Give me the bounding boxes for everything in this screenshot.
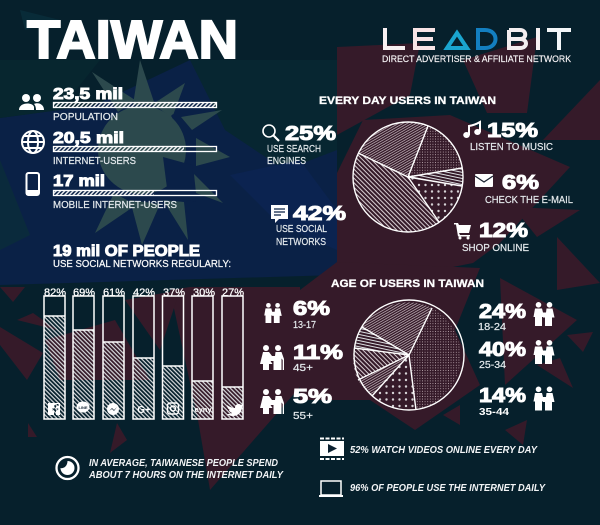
icon: music note [463,122,481,138]
stat: mobile users: 17 mil [53,173,105,190]
icon: twitter [227,404,243,416]
age stat: 25-34 [479,339,554,371]
icon: middle aged [534,386,554,410]
age stat: 13-17 [264,298,330,331]
age stat: 45+ [260,342,343,374]
icon: globe [22,131,44,153]
icon: video [320,438,344,459]
logo: Leadbit: DIRECT ADVERTISER & AFFILIATE NETWORK [382,54,572,65]
stat: shopping: 12% [479,220,528,242]
stat: population: 23,5 mil [53,86,123,103]
bar chart: social networks: 37% [163,287,185,299]
bar chart: social networks: 82% [44,287,66,299]
heading: every day users: EVERY DAY USERS IN TAIWAN [319,95,496,107]
icon: magnifier [263,125,279,141]
bar chart: social networks: 61% [103,287,125,299]
icon: line: LINE [78,405,88,410]
stat: search engines: USE SEARCH [267,143,321,155]
stat: internet users: INTERNET-USERS [53,155,136,167]
stat: e-mail [475,172,573,206]
icon: facebook [48,403,60,415]
icon: instagram [168,403,178,414]
age stat: 45+: 11% [293,342,343,364]
callout: daily hours [56,457,284,481]
age stat: 55+ [260,386,332,422]
logo: Leadbit [382,28,572,65]
icon: laptop [319,481,343,497]
stat: music [463,120,553,153]
icon: line [76,402,90,412]
stat: shopping: SHOP ONLINE [462,242,529,254]
icon: chat bubble [271,205,288,223]
stat: search engines [263,123,336,167]
bar chart: social networks: 30% [193,287,215,299]
age stat: 35-44 [479,385,554,418]
stat: internet users [22,130,216,167]
callout: watch videos [320,438,538,459]
icon: elderly [260,389,284,414]
icon: clock [56,457,78,479]
bar chart: social networks: 69% [73,287,95,299]
stat: mobile users: MOBILE INTERNET-USERS [53,199,177,211]
age stat: 25-34: 40% [479,339,526,361]
stat: social networks: NETWORKS [276,236,326,248]
callout: daily hours: ABOUT 7 HOURS ON THE INTERNET DAILY [88,470,284,481]
stat: mobile users [26,173,216,211]
age stat: 25-34: 25-34 [479,359,506,371]
icon: seniors [260,345,284,370]
heading: social networks [53,243,231,270]
heading: social networks: 19 mil OF PEOPLE [53,243,200,260]
heading: age of users: AGE OF USERS IN TAIWAN [331,278,484,290]
stat: music: LISTEN TO MUSIC [470,141,553,153]
pie chart: age of users [353,300,464,410]
icon: adults [534,340,554,364]
stat: music: 15% [487,120,538,142]
title: TAIWAN [27,10,238,70]
age stat: 13-17: 13-17 [293,319,316,331]
age stat: 18-24 [478,301,554,333]
stat: search engines: 25% [285,123,336,145]
callout: watch videos: 52% WATCH VIDEOS ONLINE EVERY DAY [350,445,538,456]
background: blue flag field [0,60,337,285]
callout: internet daily: 96% OF PEOPLE USE THE INTERNET DAILY [350,483,546,494]
callout: internet daily [319,481,546,497]
pie chart: every day users [353,122,463,232]
stat: internet users: 20,5 mil [53,130,124,147]
age stat: 35-44: 35-44 [479,407,510,418]
stat: population [19,86,216,123]
age stat: 35-44: 14% [479,385,526,407]
icon: google plus: G+ [137,405,151,416]
background: blue-white sun [92,60,230,245]
age stat: 18-24: 24% [479,301,526,323]
stat: search engines: ENGINES [267,155,306,167]
callout: daily hours: IN AVERAGE, TAIWANESE PEOPLE SPEND [89,458,278,469]
age stat: 13-17: 6% [293,298,330,320]
icon: envelope [475,174,493,187]
icon: phone [26,173,39,195]
heading: social networks: USE SOCIAL NETWORKS REGULARLY: [53,259,231,270]
age stat: 55+: 55+ [293,410,313,422]
stat: shopping [454,220,529,254]
stat: social networks [271,203,346,248]
bar chart: social networks [44,287,244,419]
icon: eyny: eyny [194,405,212,414]
icon: people [19,94,44,110]
icon: teens [264,303,282,323]
bar chart: social networks: 27% [222,287,244,299]
age stat: 45+: 45+ [293,362,313,374]
age stat: 18-24: 18-24 [478,321,506,333]
icon: young adults [534,302,554,326]
stat: e-mail: CHECK THE E-MAIL [485,194,573,206]
stat: population: POPULATION [53,111,118,123]
stat: social networks: 42% [293,203,346,225]
stat: social networks: USE SOCIAL [276,223,327,235]
bar chart: social networks: 42% [133,287,155,299]
stat: e-mail: 6% [502,172,539,194]
icon: messenger [107,403,119,415]
age stat: 55+: 5% [293,386,332,408]
icon: cart [454,223,471,240]
